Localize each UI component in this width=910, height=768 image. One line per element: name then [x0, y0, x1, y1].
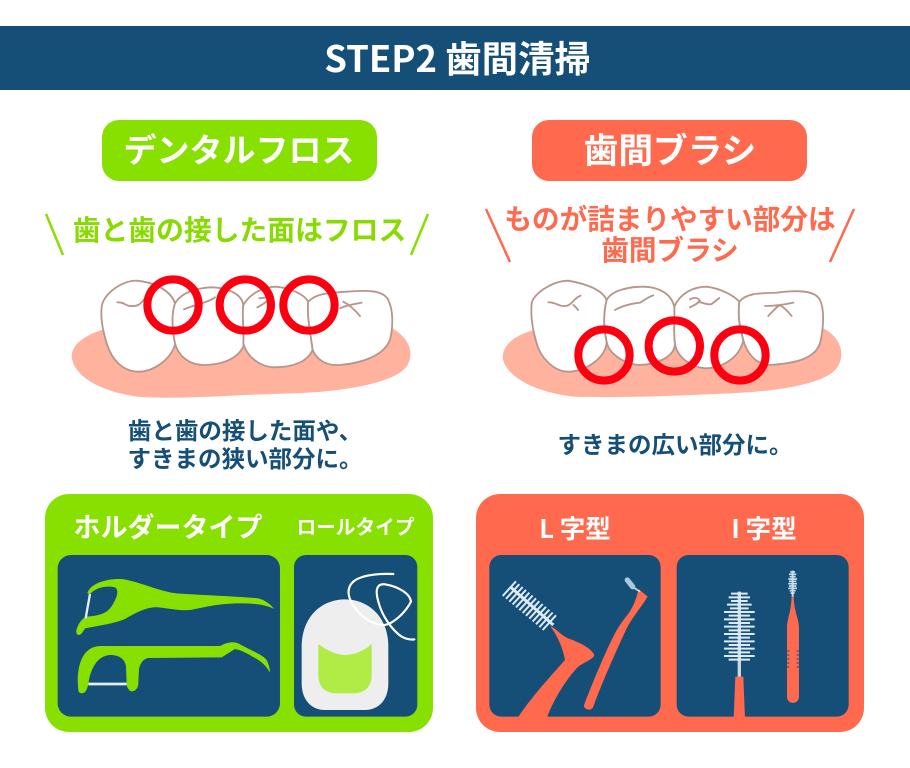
label: roll type: ロールタイプ [296, 511, 415, 540]
callout: brush usage: ものが詰まりやすい部分は [504, 197, 836, 237]
title banner [0, 26, 910, 90]
heading: dental floss: デンタルフロス [124, 124, 354, 172]
text: floss description: すきまの狭い部分に。 [128, 440, 362, 474]
text: brush description: すきまの広い部分に。 [558, 426, 792, 460]
callout: brush usage: 歯間ブラシ [601, 228, 739, 268]
text: floss description: 歯と歯の接した面や、 [128, 412, 362, 446]
title banner: STEP2 歯間清掃 [324, 31, 591, 83]
panel: interdental brush description [486, 120, 854, 460]
icon: I-shaped brushes [677, 555, 849, 718]
label: holder type: ホルダータイプ [74, 506, 262, 545]
heading: dental floss [102, 120, 377, 181]
icon: holder type flossers [58, 555, 280, 717]
illustration: teeth with gaps circled [503, 281, 841, 397]
heading: interdental brush [532, 120, 807, 181]
illustration: teeth with contact points circled [72, 279, 410, 398]
icon: L-shaped brushes [489, 555, 661, 718]
panel: brush types [476, 494, 864, 732]
icon: floss roll [294, 555, 417, 717]
label: I type: I 字型 [731, 509, 797, 546]
panel: floss types [45, 494, 433, 732]
heading: interdental brush: 歯間ブラシ [584, 123, 756, 173]
callout: floss usage: 歯と歯の接した面はフロス [73, 209, 406, 249]
text: floss description [128, 412, 362, 474]
callout: brush usage [486, 197, 854, 268]
panel: dental floss description [46, 120, 428, 474]
label: L type: L 字型 [539, 509, 611, 546]
